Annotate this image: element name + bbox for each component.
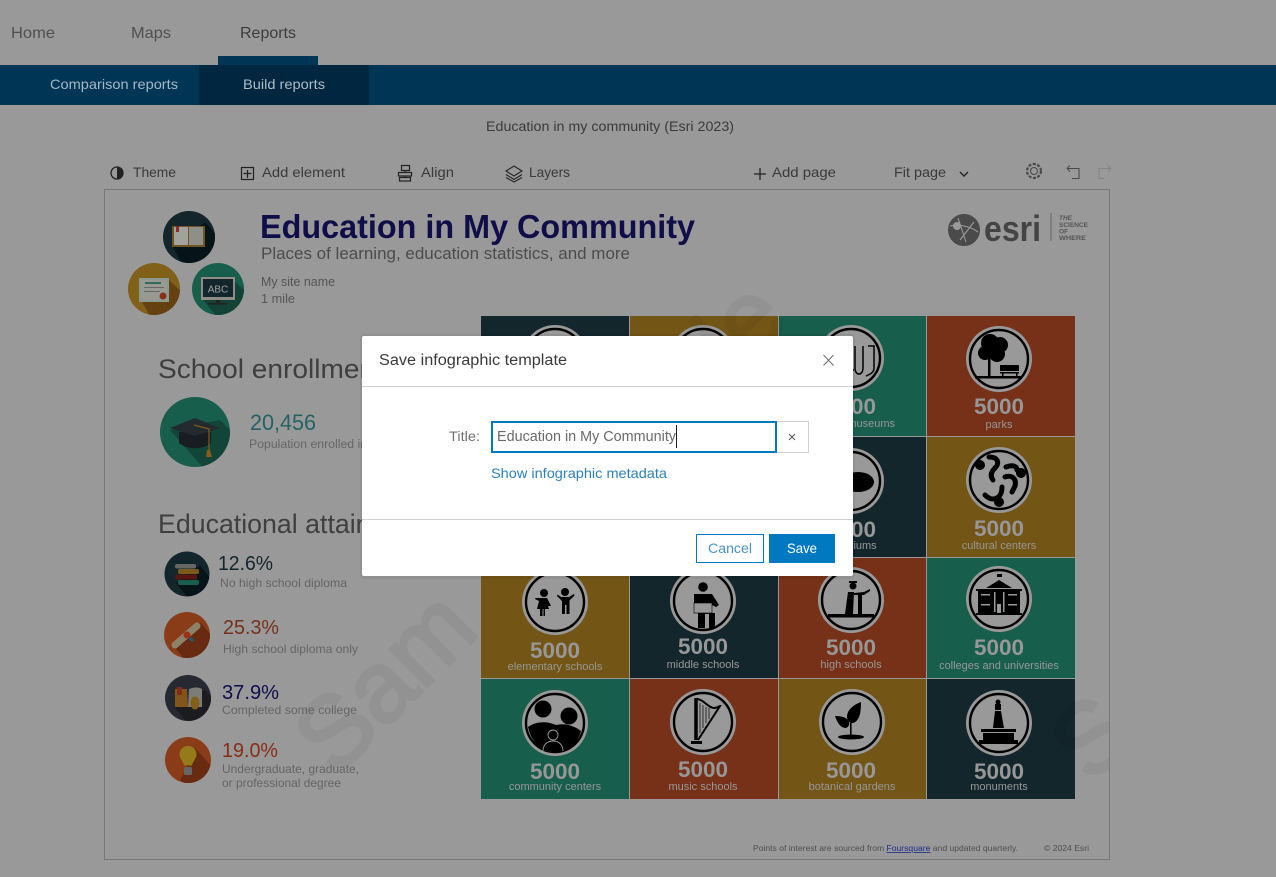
tile: botanical gardens: botanical gardens: [809, 781, 896, 793]
icon: light bulb: [165, 737, 211, 783]
toolbar: [111, 164, 1111, 182]
footer source note: © 2024 Esri: [1044, 844, 1089, 853]
label: degree: or professional degree: [222, 776, 341, 790]
icon: open book: [163, 211, 215, 263]
tile: high schools: 5000: [826, 635, 876, 660]
footer source note: Points of interest are sourced from Foursquare and updated quarterly.: [753, 844, 1018, 853]
panel: school enrollment: [159, 358, 362, 467]
watermark: sample: Sam ple: [272, 259, 807, 794]
tile: music schools: music schools: [668, 781, 738, 793]
tile: aquariums: 5000: [826, 517, 876, 542]
stat label: Population enrolled in school: [249, 439, 406, 451]
icon: redo: [1099, 166, 1111, 178]
cancel button: [696, 534, 764, 562]
tile: high schools: high schools: [820, 659, 882, 671]
modal shadow: [360, 334, 855, 579]
label: no diploma: No high school diploma: [220, 576, 347, 590]
watermark: sample: [272, 259, 1276, 801]
tile: middle schools: middle schools: [667, 659, 740, 671]
esri logo: esri: [984, 208, 1041, 249]
panel: educational attainment: [160, 514, 362, 790]
tile: colleges and universities: colleges and universities: [939, 660, 1059, 672]
icon: settings gear: [1027, 164, 1041, 178]
icon: undo: [1067, 166, 1079, 178]
metadata link: Show infographic metadata: [491, 465, 667, 481]
stat: no diploma: 12.6%: [218, 553, 273, 575]
stat: enrolled population: 20,456: [250, 410, 316, 435]
tile: middle schools: 5000: [678, 634, 728, 659]
tile: elementary schools: [481, 558, 629, 678]
modal panel: [362, 336, 853, 576]
tile: community centers: community centers: [509, 781, 602, 793]
icon: add page: [754, 168, 766, 180]
tile: botanical gardens: 5000: [826, 758, 876, 783]
tile: aquariums: [779, 437, 926, 557]
icon: add element: [242, 168, 254, 180]
site name: My site name: [261, 275, 335, 289]
subtitle: Places of learning, education statistics, and more: [261, 244, 630, 263]
heading: school enrollment: School enrollment: [158, 354, 384, 384]
tile: colleges and universities: [927, 558, 1075, 678]
tile: parks: 5000: [974, 394, 1024, 419]
heading: educational attainment: Educational attainment: [158, 509, 430, 539]
label: degree: [222, 762, 359, 790]
tile: row 2 column 2: [630, 437, 778, 557]
toolbar: Theme: [133, 164, 176, 180]
infographic page frame: [104, 190, 1110, 860]
label: high school: High school diploma only: [223, 642, 358, 656]
icon: globe: [948, 214, 980, 246]
icon: diploma: [128, 263, 180, 315]
tile: music schools: [630, 679, 778, 799]
tile: middle schools: [630, 558, 778, 678]
modal: save infographic template: [360, 334, 855, 579]
tile: community centers: [481, 679, 629, 799]
tile: parks: parks: [986, 419, 1013, 431]
tile: elementary schools: 5000: [530, 638, 580, 663]
toolbar: Layers: [529, 164, 570, 180]
tile: parks: [927, 316, 1075, 436]
title: Education in My Community: [260, 208, 696, 245]
toolbar: Align: [421, 164, 454, 180]
clear button: [776, 422, 808, 452]
icon: graduation cap: [160, 397, 230, 467]
save button: Save: [787, 540, 817, 556]
icon: diploma scroll: [164, 612, 210, 658]
top navigation: Maps: [131, 25, 171, 42]
icon: chevron: [960, 172, 968, 176]
title input: [492, 422, 776, 452]
sub navigation bar: Build reports: [243, 76, 325, 92]
tile: community centers: 5000: [530, 759, 580, 784]
modal heading: Save infographic template: [379, 352, 567, 369]
esri logo: THE: [1059, 215, 1073, 222]
toolbar: Fit page: [894, 164, 946, 180]
sub navigation bar: [0, 65, 1276, 105]
tile: botanical gardens: [779, 679, 926, 799]
title input: Education in My Community: [497, 429, 677, 445]
tile: row 2 column 1: [481, 437, 629, 557]
tile: cultural centers: [927, 437, 1075, 557]
esri logo: WHERE: [1059, 235, 1087, 242]
icon: align: [398, 166, 412, 181]
tile: cultural centers: 5000: [974, 516, 1024, 541]
top navigation: Reports: [240, 25, 296, 42]
field label: Title:: [449, 428, 480, 444]
stat: some college: 37.9%: [222, 682, 279, 704]
label: some college: Completed some college: [222, 703, 357, 717]
top navigation: [11, 25, 318, 65]
tile: monuments: monuments: [970, 781, 1028, 793]
esri logo: [948, 208, 1089, 249]
icon: book and pear: [165, 675, 211, 721]
sub navigation bar: Comparison reports: [50, 76, 178, 92]
tile: row 1 column 1: [481, 316, 629, 436]
icon: chalkboard ABC: ABC: [208, 284, 228, 296]
stat: degree: 19.0%: [222, 740, 278, 762]
tile: monuments: 5000: [974, 759, 1024, 784]
icon: theme: [111, 167, 123, 179]
tile: elementary schools: elementary schools: [508, 661, 603, 673]
top navigation: Home: [11, 25, 55, 42]
stat: high school: 25.3%: [223, 617, 279, 639]
icon: stack of books: [164, 552, 210, 596]
cancel button: Cancel: [708, 540, 752, 556]
points of interest tile grid: [481, 316, 1075, 799]
tile: monuments: [927, 679, 1075, 799]
tile: colleges and universities: 5000: [974, 635, 1024, 660]
toolbar: Add page: [772, 164, 836, 180]
save button: [769, 534, 835, 563]
toolbar: Add element: [262, 164, 345, 180]
tile: cultural centers: cultural centers: [962, 540, 1037, 552]
tile: music schools: 5000: [678, 757, 728, 782]
label: degree: Undergraduate, graduate,: [222, 762, 359, 776]
tile: aquariums: aquariums: [825, 540, 877, 552]
site radius: 1 mile: [261, 292, 295, 306]
icon: layers: [506, 166, 522, 182]
header icons: [128, 211, 244, 315]
tile: museums: 5000: [826, 394, 876, 419]
esri logo: OF: [1059, 228, 1068, 236]
tile: museums: [779, 316, 926, 436]
esri logo: SCIENCE: [1059, 222, 1089, 229]
tile: high schools: [779, 558, 926, 678]
icon: close: [824, 355, 834, 366]
report name: Education in my community (Esri 2023): [486, 119, 734, 134]
tile: museums: science museums: [807, 418, 896, 430]
tile: row 1 column 2: [630, 316, 778, 436]
